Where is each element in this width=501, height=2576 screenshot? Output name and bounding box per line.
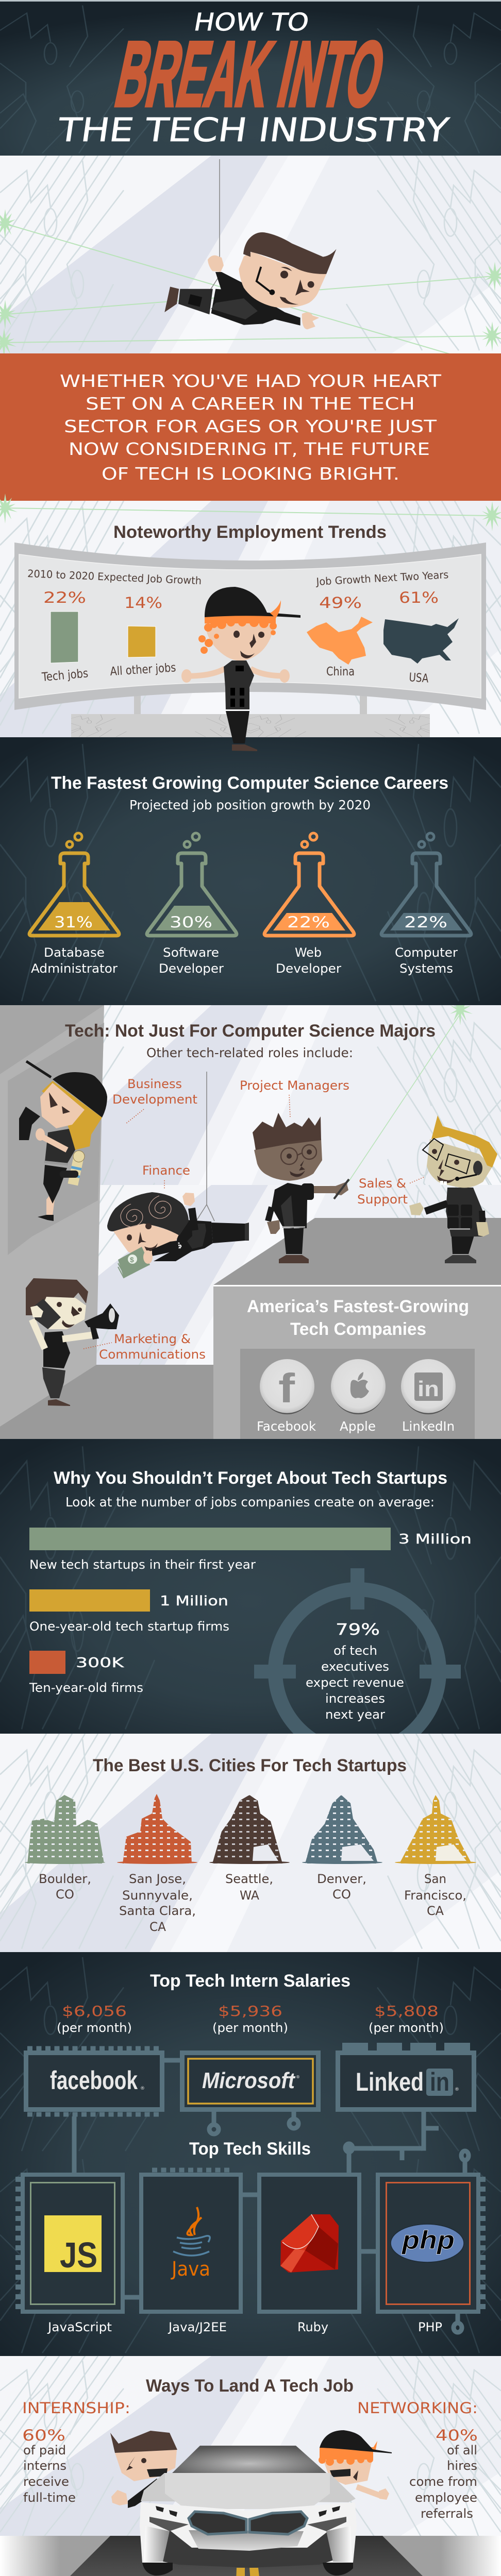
chip: Microsoft: ® [296,2075,300,2079]
panel: fastest growing companies: America’s Fastest-Growing [247,1297,469,1316]
city: Denver: CO [332,1887,351,1902]
laser beam [0,494,501,531]
heading: Tech: Not Just For Computer Science Majors [65,1021,436,1041]
chart: job growth next two years: 49% [319,594,362,612]
chip: JavaScript: JavaScript [47,2320,112,2334]
subheading: Look at the number of jobs companies create on average: [65,1495,435,1510]
chart: job growth next two years [307,568,459,686]
panel: fastest growing companies [213,1286,501,1439]
chip: PHP: php [401,2226,455,2255]
flask: database administrator: 31% [54,913,93,931]
intro text [60,371,442,484]
icon: LinkedIn: LinkedIn [402,1419,455,1434]
flask: software developer: 30% [170,913,212,931]
internship stat: full-time [23,2490,76,2505]
bar: ten-year-old firms: Ten-year-old firms [29,1681,143,1695]
character: hanging finance woman: $ [174,1240,183,1251]
flask: web developer: 22% [287,913,330,931]
car [140,2446,357,2575]
flask: web developer: Developer [276,961,341,976]
flask: software developer [147,833,237,976]
role labels: Marketing & [114,1332,191,1346]
flask: database administrator: Database [44,945,105,960]
title: THE TECH INDUSTRY [55,111,452,149]
internship stat: receive [23,2475,69,2489]
heading: The Fastest Growing Computer Science Careers [51,773,448,793]
bar: one-year-old firms [29,1589,229,1634]
callout: 79 percent target: 79% [336,1621,380,1639]
intro text: WHETHER YOU'VE HAD YOUR HEART [60,371,442,391]
character: man with glasses and headset [409,1115,497,1263]
flask: computer systems: Systems [399,961,453,976]
flask: software developer: Software [163,945,219,960]
chip: Ruby [259,2175,359,2334]
intro text: OF TECH IS LOOKING BRIGHT. [102,464,399,484]
chip: Ruby: Ruby [297,2320,328,2334]
chart: job growth next two years: USA [409,671,429,686]
salary figures: (per month) [369,2021,444,2035]
city: Seattle: Seattle, [225,1872,273,1886]
icon: LinkedIn: in [417,1377,439,1401]
laser pointer beam [348,995,473,1182]
rope [210,159,220,289]
title [55,8,452,149]
callout: 79 percent target: expect revenue [306,1675,404,1690]
networking stat: NETWORKING: [357,2399,478,2417]
panel: fastest growing companies: Tech Companies [290,1319,426,1339]
chip: LinkedIn: ® [455,2087,459,2092]
flask: computer systems: 22% [404,913,447,931]
hanging man [164,232,337,329]
chip: Facebook: ® [140,2086,145,2091]
city: San Jose, Sunnyvale, Santa Clara: CA [149,1920,166,1934]
screen [14,543,486,710]
chip: Facebook [26,2048,162,2114]
city: San Jose, Sunnyvale, Santa Clara: Santa Clara, [119,1904,196,1918]
flask: software developer: Developer [159,961,224,976]
bar: new startups: 3 Million [398,1532,472,1547]
city: Boulder [25,1795,105,1902]
callout: 79 percent target: next year [325,1707,385,1722]
icon: LinkedIn [401,1359,456,1434]
character: hanging finance woman [107,1192,249,1278]
city: Boulder: CO [56,1887,74,1902]
role labels: Development [112,1092,197,1107]
subheading: Projected job position growth by 2020 [129,798,371,812]
internship stat: 60% [22,2427,65,2444]
heading: The Best U.S. Cities For Tech Startups [93,1756,407,1775]
panel: ways to land a tech job [0,2356,501,2576]
flask: web developer [264,833,354,976]
laser beams [0,209,501,367]
road [0,2536,501,2576]
chart: 2010 to 2020 job growth: 22% [43,589,86,606]
icon: Facebook [257,1359,316,1434]
chart: 2010 to 2020 job growth: Tech jobs [41,667,89,684]
rope [195,1072,214,1223]
city: San Francisco: CA [427,1904,444,1918]
subheading: Other tech-related roles include: [146,1045,353,1060]
character: marketing woman with megaphone [26,1278,119,1406]
flask: database administrator [29,833,119,976]
networking stat: of all [447,2443,477,2458]
intro text: SECTOR FOR AGES OR YOU'RE JUST [64,416,437,436]
chart: job growth next two years: 61% [399,589,439,606]
networking stat: employee [415,2490,477,2505]
circuit connectors [74,2060,469,2332]
icon: Apple [331,1359,386,1434]
chart: 2010 to 2020 job growth: All other jobs [110,661,176,679]
role labels: Business [127,1077,182,1091]
callout: 79 percent target: executives [321,1659,389,1674]
city: San Jose, Sunnyvale, Santa Clara: Sunnyvale, [122,1888,193,1903]
city: San Jose, Sunnyvale, Santa Clara [117,1794,197,1934]
stage base [71,694,430,737]
chip: Java: Java [171,2258,210,2280]
panel: fastest growing careers [0,737,501,1005]
bar: ten-year-old firms: 300K [76,1655,124,1671]
networking stat: come from [409,2475,477,2489]
salary figures: (per month) [212,2021,288,2035]
role labels: Communications [99,1347,206,1362]
bar: one-year-old firms: One-year-old tech startup firms [29,1619,229,1634]
salary figures: (per month) [57,2021,132,2035]
chart: 2010 to 2020 job growth: 14% [124,594,162,612]
role labels: Support [357,1192,408,1207]
city: San Francisco [395,1795,476,1918]
panel: hanging man scene [0,156,501,367]
city: Denver [302,1795,382,1902]
internship stat: INTERNSHIP: [22,2399,130,2417]
woman presenter [181,587,300,751]
chip: LinkedIn: in [430,2067,449,2096]
role labels: Project Managers [240,1078,349,1093]
intro text: NOW CONSIDERING IT, THE FUTURE [69,439,430,459]
panel: intro banner [0,353,501,501]
salary figures [57,2003,444,2035]
title: HOW TO [192,8,311,37]
city: Seattle [209,1795,290,1903]
chip: PHP [378,2175,483,2334]
heading: Top Tech Intern Salaries [150,1971,350,1991]
callout: 79 percent target: of tech [333,1643,377,1658]
salary figures: $5,936 [218,2003,282,2020]
character: woman behind car [319,2430,392,2500]
intro text: SET ON A CAREER IN THE TECH [86,394,415,414]
character: man behind car [110,2431,177,2508]
bar: one-year-old firms: 1 Million [160,1594,228,1609]
icon: money [118,1247,153,1278]
city: San Jose, Sunnyvale, Santa Clara: San Jose, [129,1872,186,1886]
bar: new startups: New tech startups in their first year [29,1557,256,1572]
character: blonde woman on phone [19,1061,107,1221]
map: China [307,617,373,665]
networking stat [357,2399,478,2521]
city: Boulder: Boulder, [39,1872,91,1886]
icon: Facebook: f [278,1365,295,1411]
flask: database administrator: Administrator [31,961,118,976]
internship stat [22,2399,130,2505]
bar: ten-year-old firms [29,1651,143,1695]
panel: tech not just for CS majors [0,995,501,1439]
panel: employment trends [0,494,501,751]
chip: Microsoft: Microsoft [202,2068,296,2093]
chip: LinkedIn: Linked [356,2067,424,2096]
chip: PHP: PHP [418,2320,442,2334]
chip: Java [141,2170,241,2334]
chip: Java: Java/J2EE [168,2320,227,2334]
city: San Francisco: Francisco, [404,1888,466,1903]
networking stat: hires [447,2459,477,2473]
role labels [99,1077,408,1362]
icon: Facebook: Facebook [257,1419,316,1434]
heading: Noteworthy Employment Trends [113,522,387,542]
chip: Microsoft [182,2053,319,2109]
city: Seattle: WA [240,1888,260,1903]
bar: new startups [29,1528,472,1572]
chip: LinkedIn [338,2043,474,2109]
walls [0,1005,501,1439]
chip: Facebook: facebook [50,2066,138,2095]
map: USA [383,618,459,664]
chart: 2010 to 2020 job growth [27,567,202,684]
salary figures: $5,808 [374,2003,439,2020]
character: project manager with laser [253,1113,349,1263]
chip: JavaScript: JS [60,2235,97,2275]
chart: job growth next two years: China [326,665,355,679]
panel: intern salaries and tech skills [0,1952,501,2356]
chart: 2010 to 2020 job growth: 2010 to 2020 Expected Job Growth [27,567,202,587]
city: Denver: Denver, [317,1872,366,1886]
icon: money: $ [130,1256,134,1264]
icon: Apple: Apple [340,1419,376,1434]
salary figures: $6,056 [62,2003,127,2020]
internship stat: interns [23,2459,66,2473]
city: San Francisco: San [424,1872,446,1886]
networking stat: 40% [436,2427,478,2444]
flask: computer systems: Computer [395,945,458,960]
callout: 79 percent target [254,1568,461,1753]
networking stat: referrals [421,2506,473,2521]
panel: best cities [0,1734,501,1952]
panel: tech startups [0,1439,501,1753]
chip: JavaScript [18,2175,123,2334]
callout: 79 percent target: increases [325,1691,385,1706]
heading: Ways To Land A Tech Job [146,2376,354,2396]
internship stat: of paid [23,2443,66,2458]
flask: computer systems [381,833,471,976]
role labels: Finance [142,1163,190,1178]
panel: header [0,0,501,157]
role labels: Sales & [359,1176,406,1191]
flask: web developer: Web [295,945,322,960]
heading: Top Tech Skills [189,2139,311,2159]
heading: Why You Shouldn’t Forget About Tech Startups [54,1468,447,1488]
chart: job growth next two years: Job Growth Next Two Years [315,568,449,588]
